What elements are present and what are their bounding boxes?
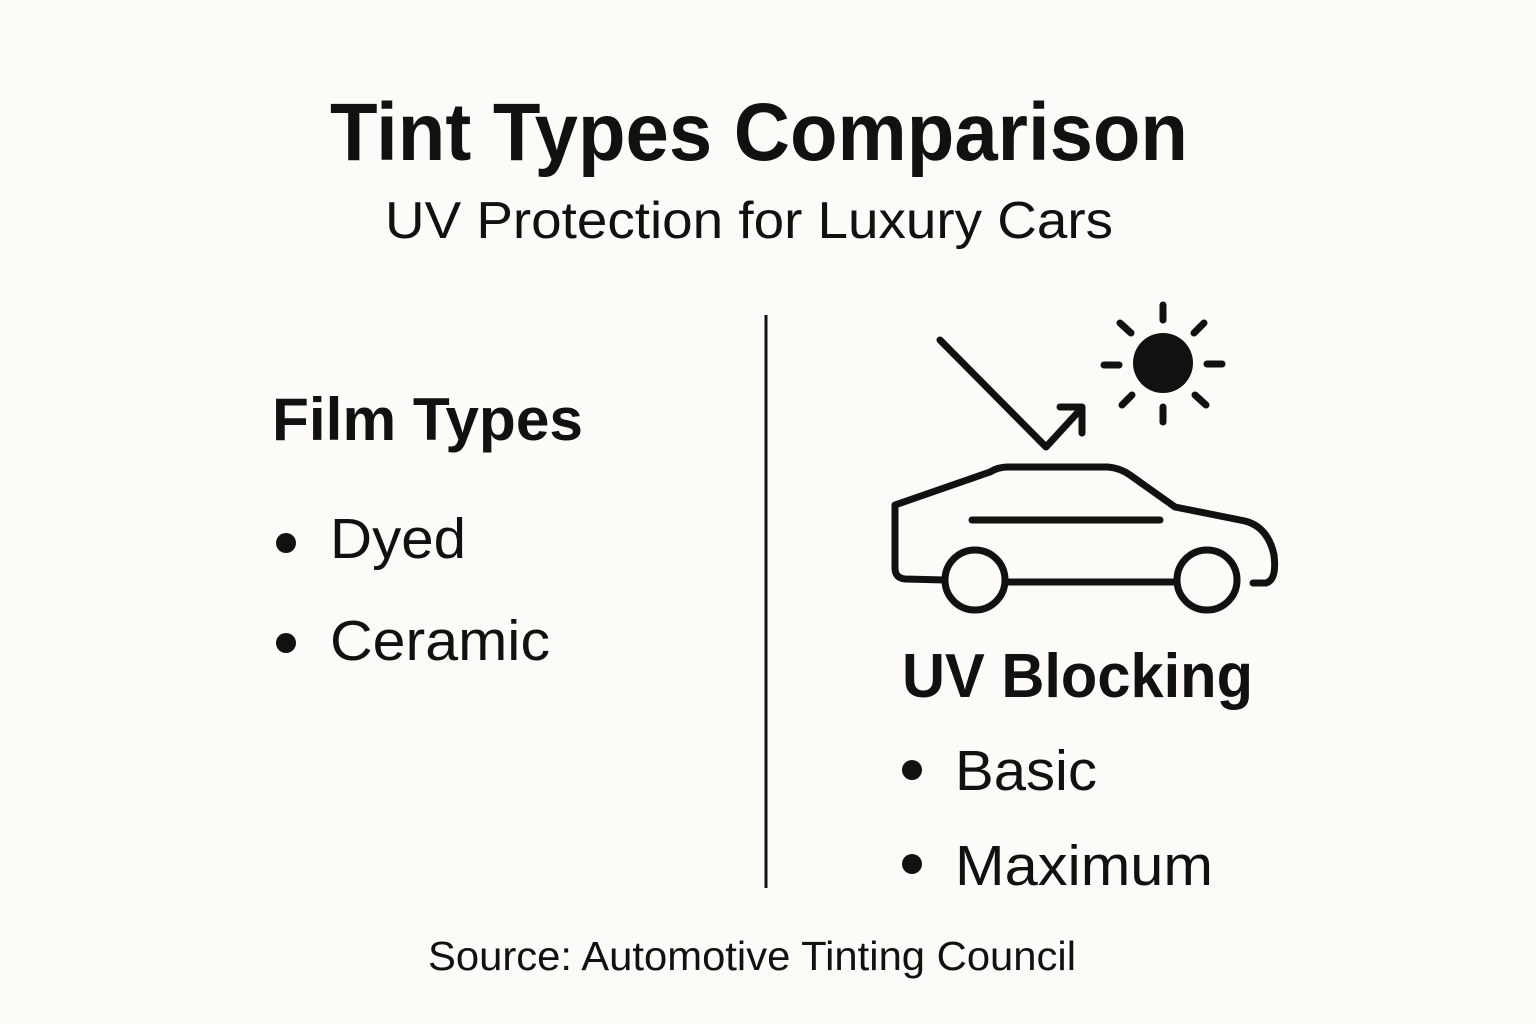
divider — [764, 315, 768, 888]
panel: film types — [272, 386, 583, 673]
heading: uv blocking: UV Blocking — [902, 642, 1253, 711]
source: Source: Automotive Tinting Council — [428, 933, 1076, 979]
bullet: dyed: Dyed — [330, 507, 466, 571]
panel: uv blocking — [895, 305, 1275, 898]
title: Tint Types Comparison — [330, 87, 1188, 178]
icon: car — [895, 467, 1275, 610]
bullet: maximum: Maximum — [955, 834, 1213, 898]
icon: sun — [1104, 305, 1222, 422]
bullet: basic: Basic — [955, 739, 1097, 803]
subtitle: UV Protection for Luxury Cars — [385, 192, 1113, 250]
bullet: ceramic: Ceramic — [330, 609, 550, 673]
icon: uv ray arrow — [940, 340, 1082, 447]
heading: film types: Film Types — [272, 386, 583, 453]
